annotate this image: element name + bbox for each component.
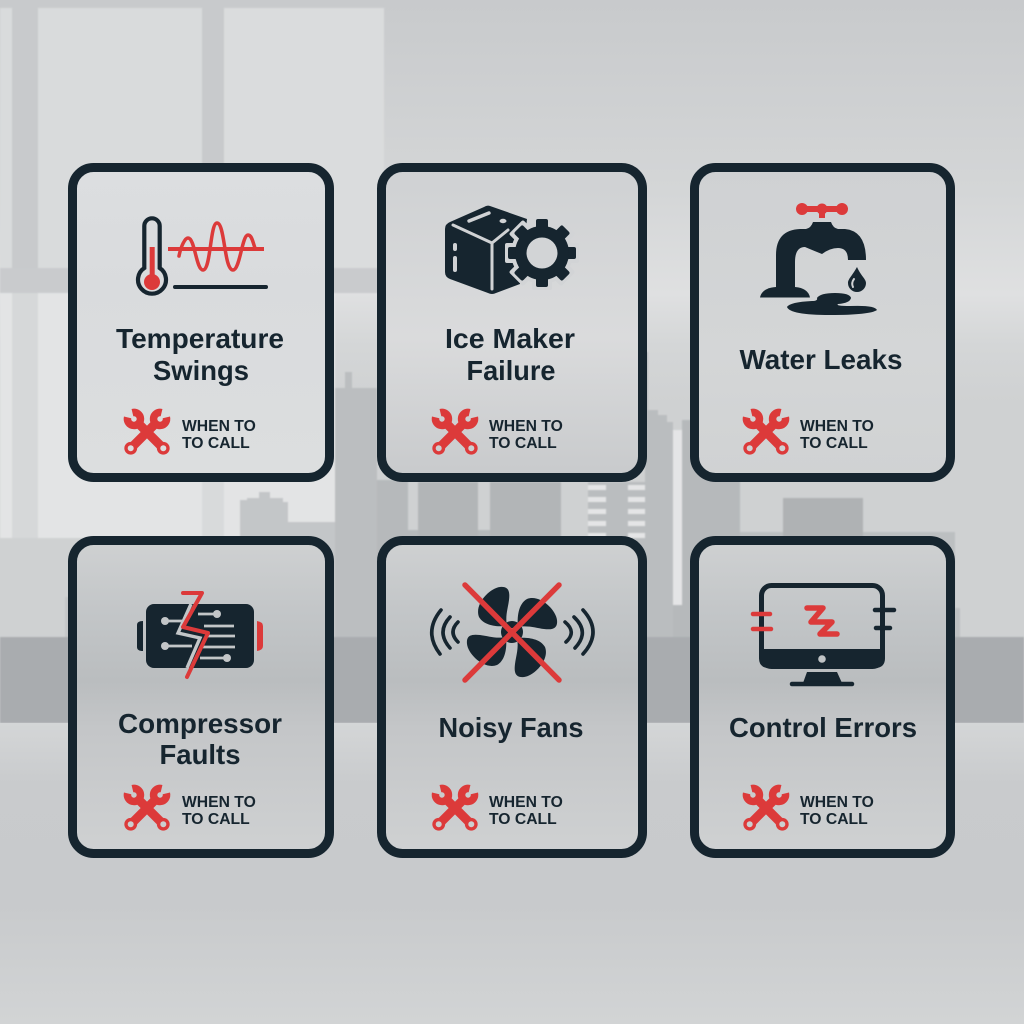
card frame bbox=[72, 540, 330, 854]
call label: WHEN TO bbox=[800, 794, 874, 811]
icon: crossed-out fan bbox=[432, 585, 593, 680]
icon: crossed wrenches bbox=[741, 410, 791, 457]
call label: WHEN TO bbox=[800, 418, 874, 435]
panel: temperature swings bbox=[72, 168, 330, 478]
heading: Faults bbox=[160, 739, 240, 770]
panel: water leaks bbox=[694, 168, 950, 478]
icon: crossed wrenches bbox=[122, 786, 172, 833]
card frame bbox=[382, 168, 642, 478]
icon: crossed wrenches bbox=[430, 410, 480, 457]
call label: WHEN TO bbox=[182, 794, 256, 811]
call label: TO CALL bbox=[800, 811, 868, 828]
card frame bbox=[694, 168, 950, 478]
heading: Temperature bbox=[116, 323, 284, 354]
call label: WHEN TO bbox=[182, 418, 256, 435]
call label: TO CALL bbox=[489, 435, 557, 452]
heading: Control Errors bbox=[729, 712, 917, 743]
card frame bbox=[72, 168, 330, 478]
panel: compressor faults bbox=[72, 540, 330, 854]
panel: control errors bbox=[694, 540, 950, 854]
panel: ice maker failure bbox=[382, 168, 642, 478]
call label bbox=[800, 794, 874, 828]
heading: Ice Maker bbox=[445, 323, 575, 354]
icon: crossed wrenches bbox=[741, 786, 791, 833]
call label: WHEN TO bbox=[489, 794, 563, 811]
panel: noisy fans bbox=[382, 540, 642, 854]
heading bbox=[118, 708, 282, 770]
card frame bbox=[382, 540, 642, 854]
heading: Noisy Fans bbox=[438, 712, 584, 743]
heading: Compressor bbox=[118, 708, 282, 739]
call label bbox=[800, 418, 874, 452]
call label: TO CALL bbox=[489, 811, 557, 828]
icon: cracked compressor bbox=[137, 593, 263, 677]
heading bbox=[445, 323, 575, 386]
heading bbox=[116, 323, 284, 386]
call label: TO CALL bbox=[182, 435, 250, 452]
call label: TO CALL bbox=[800, 435, 868, 452]
icon: ice cube with gear bbox=[445, 206, 579, 294]
call label: WHEN TO bbox=[489, 418, 563, 435]
call label bbox=[182, 794, 256, 828]
card frame bbox=[694, 540, 950, 854]
icon: crossed wrenches bbox=[122, 410, 172, 457]
icon: monitor with error bbox=[753, 586, 894, 684]
call label: TO CALL bbox=[182, 811, 250, 828]
icon: thermometer with red wave bbox=[138, 218, 266, 294]
call label bbox=[489, 418, 563, 452]
icon: crossed wrenches bbox=[430, 786, 480, 833]
call label bbox=[182, 418, 256, 452]
heading: Failure bbox=[466, 355, 556, 386]
call label bbox=[489, 794, 563, 828]
heading: Water Leaks bbox=[740, 344, 902, 375]
icon: leaking faucet bbox=[760, 203, 877, 315]
heading: Swings bbox=[153, 355, 249, 386]
